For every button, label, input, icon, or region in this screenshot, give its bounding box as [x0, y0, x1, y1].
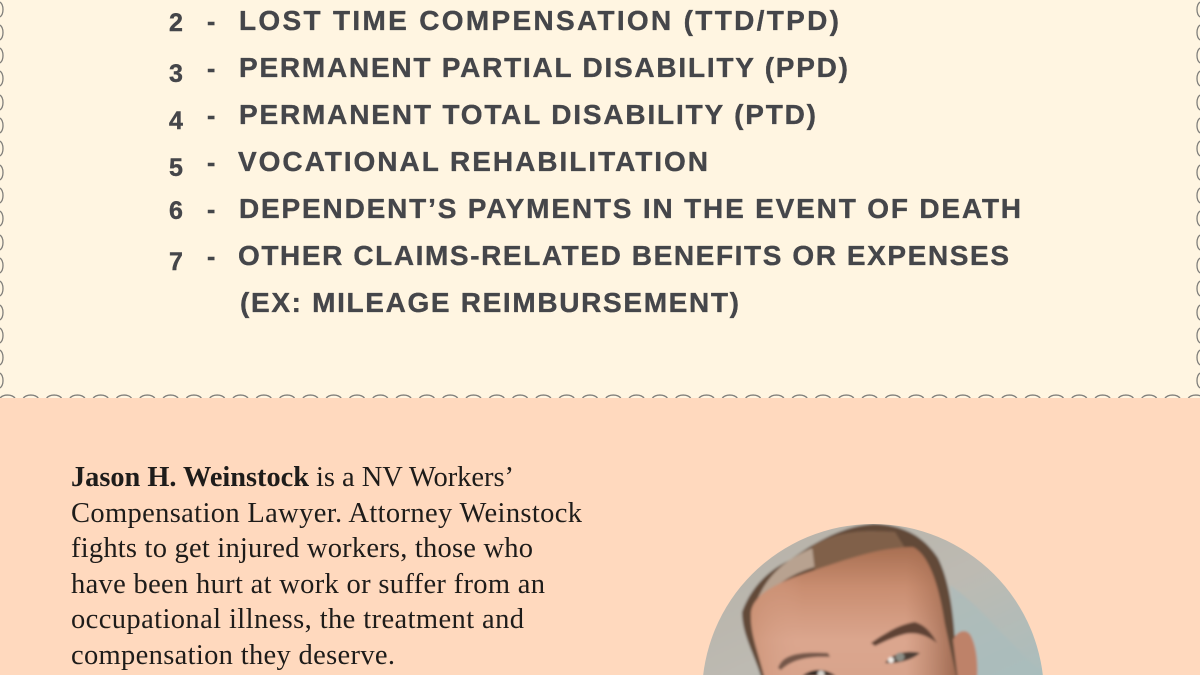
- face: [751, 547, 957, 675]
- scalloped border: [0, 2, 1200, 398]
- list item 2: -: [207, 8, 215, 36]
- list item 6: 6: [169, 197, 183, 225]
- attorney biography text: occupational illness, the treatment and: [71, 604, 524, 635]
- list item 7: -: [207, 243, 215, 271]
- hair: [742, 524, 960, 675]
- attorney biography text: Jason H. Weinstock: [71, 462, 309, 493]
- list item 4: -: [207, 102, 215, 130]
- list item 4: PERMANENT TOTAL DISABILITY (PTD): [239, 99, 816, 130]
- attorney biography text: is a NV Workers’: [316, 462, 514, 493]
- attorney biography text: fights to get injured workers, those who: [71, 533, 533, 564]
- list item 5: VOCATIONAL REHABILITATION: [238, 146, 708, 177]
- list item 7: 7: [169, 248, 183, 276]
- list item 7: (EX: MILEAGE REIMBURSEMENT): [240, 287, 739, 318]
- attorney biography text: [71, 462, 583, 671]
- attorney biography text: Compensation Lawyer. Attorney Weinstock: [71, 498, 583, 529]
- list item 3: -: [207, 55, 215, 83]
- list item 6: -: [207, 196, 215, 224]
- list item 2: LOST TIME COMPENSATION (TTD/TPD): [239, 5, 839, 36]
- eyes: [885, 652, 920, 663]
- panel: benefits list: [0, 0, 1200, 398]
- list item 7: OTHER CLAIMS-RELATED BENEFITS OR EXPENSES: [238, 240, 1009, 271]
- attorney biography text: have been hurt at work or suffer from an: [71, 569, 545, 600]
- list item 6: DEPENDENT’S PAYMENTS IN THE EVENT OF DEATH: [239, 193, 1021, 224]
- ear: [953, 631, 977, 675]
- list item 5: 5: [169, 154, 183, 182]
- eyebrows: [778, 653, 830, 670]
- list item 3: PERMANENT PARTIAL DISABILITY (PPD): [239, 52, 848, 83]
- list item 5: -: [207, 149, 215, 177]
- portrait photo of attorney: [703, 524, 1043, 675]
- panel: attorney bio: [0, 398, 1200, 675]
- list item 2: 2: [169, 9, 183, 37]
- list item 3: 3: [169, 60, 183, 88]
- attorney biography text: compensation they deserve.: [71, 640, 395, 671]
- list item 7: [169, 240, 1009, 318]
- list item 4: 4: [169, 107, 183, 135]
